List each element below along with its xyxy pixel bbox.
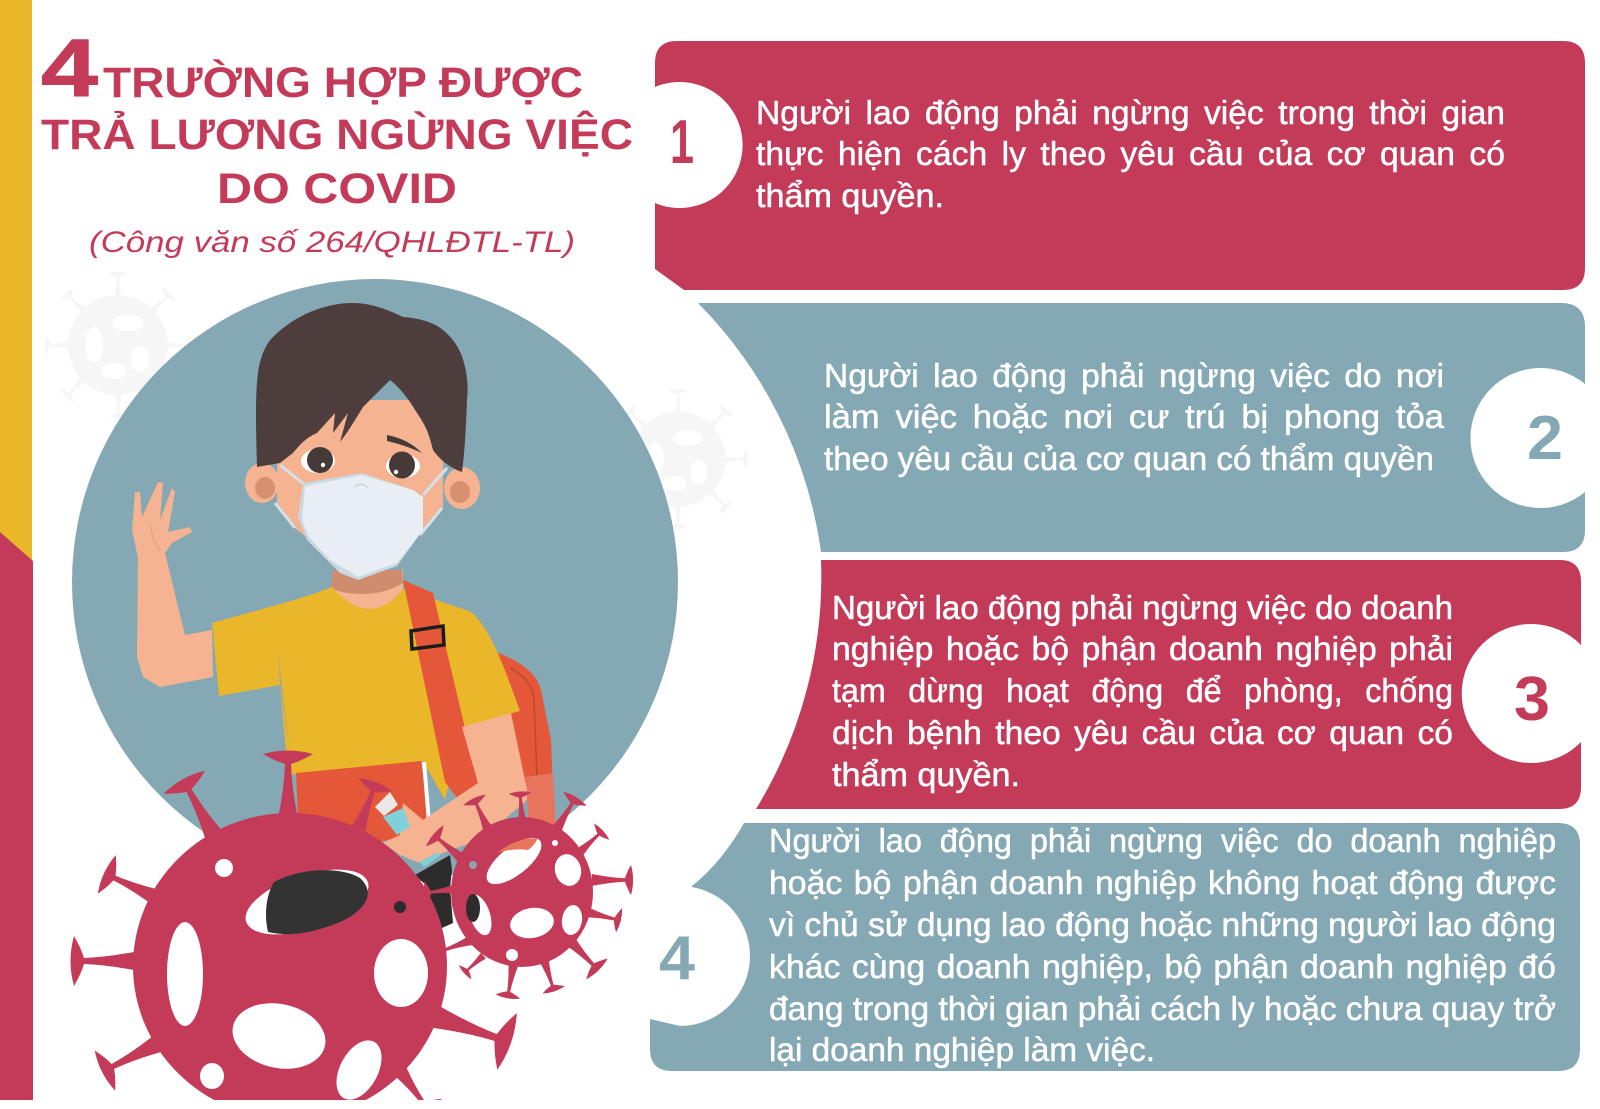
small virus spikes <box>423 790 633 1000</box>
character <box>132 303 556 943</box>
text: case 2: làm việc hoặc nơi cư trú bị phong tỏa <box>824 398 1445 435</box>
text: case 4: vì chủ sử dụng lao động hoặc những người lao động <box>769 906 1556 943</box>
title <box>41 23 633 213</box>
face <box>277 400 443 575</box>
number badge 2: 2 <box>1527 404 1563 473</box>
virus eye <box>246 870 368 934</box>
text: case 1 <box>756 94 1505 214</box>
small virus <box>423 790 633 1000</box>
backpack <box>490 650 556 835</box>
title: TRẢ LƯƠNG NGỪNG VIỆC <box>41 110 633 159</box>
hand sanitizer <box>375 792 440 867</box>
shirt fold <box>278 653 290 752</box>
panel: case 3 <box>756 560 1581 809</box>
mask straps <box>275 465 447 535</box>
right arm and hand <box>383 713 527 863</box>
face mask <box>298 473 423 580</box>
title: 4 <box>41 23 98 114</box>
virus holes <box>167 859 428 1107</box>
text: case 4: Người lao động phải ngừng việc do doanh nghiệp <box>769 822 1556 859</box>
big virus <box>70 750 521 1109</box>
number badge 4 <box>650 886 750 1026</box>
small virus body <box>451 817 593 967</box>
shoe <box>442 933 463 943</box>
title: DO COVID <box>217 165 457 213</box>
text: case 4: đang trong thời gian phải cách ly hoặc chưa quay trở <box>769 990 1556 1027</box>
text: case 1: Người lao động phải ngừng việc trong thời gian <box>756 94 1505 131</box>
text: case 2 <box>824 357 1445 477</box>
number badge 3 <box>1462 624 1581 763</box>
text: case 3: dịch bệnh theo yêu cầu của cơ quan có <box>832 714 1453 751</box>
text: case 3 <box>832 589 1453 793</box>
text: case 1: thực hiện cách ly theo yêu cầu của cơ quan có <box>756 135 1505 172</box>
text: case 3: tạm dừng hoạt động để phòng, chống <box>832 672 1453 709</box>
legs <box>415 855 453 928</box>
number badge 1: 1 <box>670 108 694 177</box>
neck <box>333 570 403 615</box>
virus body <box>133 813 447 1109</box>
text: case 1: thẩm quyền. <box>756 177 944 214</box>
number badge 1 <box>655 82 743 208</box>
text: case 3: Người lao động phải ngừng việc do doanh <box>832 589 1453 626</box>
strap buckle <box>411 626 444 649</box>
subtitle: (Công văn số 264/QHLĐTL-TL) <box>89 226 575 259</box>
text: case 4 <box>769 822 1556 1068</box>
eyes <box>301 435 422 478</box>
text: case 4: lại doanh nghiệp làm việc. <box>769 1031 1155 1068</box>
panel: case 4 <box>650 822 1580 1071</box>
number badge 3: 3 <box>1514 665 1550 734</box>
number badge 4: 4 <box>659 924 696 993</box>
watermark virus right <box>608 389 748 529</box>
red side bar <box>0 532 33 1100</box>
text: case 2: theo yêu cầu của cơ quan có thẩm quyền <box>824 440 1434 477</box>
hair <box>256 303 468 472</box>
raised arm and hand <box>132 482 213 687</box>
panel: case 2 <box>698 303 1585 552</box>
text: case 3: thẩm quyền. <box>832 756 1020 793</box>
neck shadow <box>331 570 403 594</box>
watermark virus left <box>45 272 191 418</box>
bag strap <box>403 580 478 798</box>
text: case 2: Người lao động phải ngừng việc do nơi <box>824 357 1444 394</box>
text: case 4: hoặc bộ phận doanh nghiệp không hoạt động được <box>769 864 1556 901</box>
number badge 2 <box>1470 368 1585 508</box>
ears <box>245 463 480 509</box>
text: case 4: khác cùng doanh nghiệp, bộ phận doanh nghiệp đó <box>769 948 1556 985</box>
yellow side bar <box>0 0 32 565</box>
title: TRƯỜNG HỢP ĐƯỢC <box>103 58 583 107</box>
book <box>296 761 431 860</box>
small virus holes <box>464 830 585 961</box>
illustration circle <box>72 279 678 885</box>
shirt <box>212 587 520 800</box>
panel: case 1 <box>655 41 1585 290</box>
virus spikes <box>70 750 521 1109</box>
text: case 3: nghiệp hoặc bộ phận doanh nghiệp phải <box>832 630 1453 667</box>
